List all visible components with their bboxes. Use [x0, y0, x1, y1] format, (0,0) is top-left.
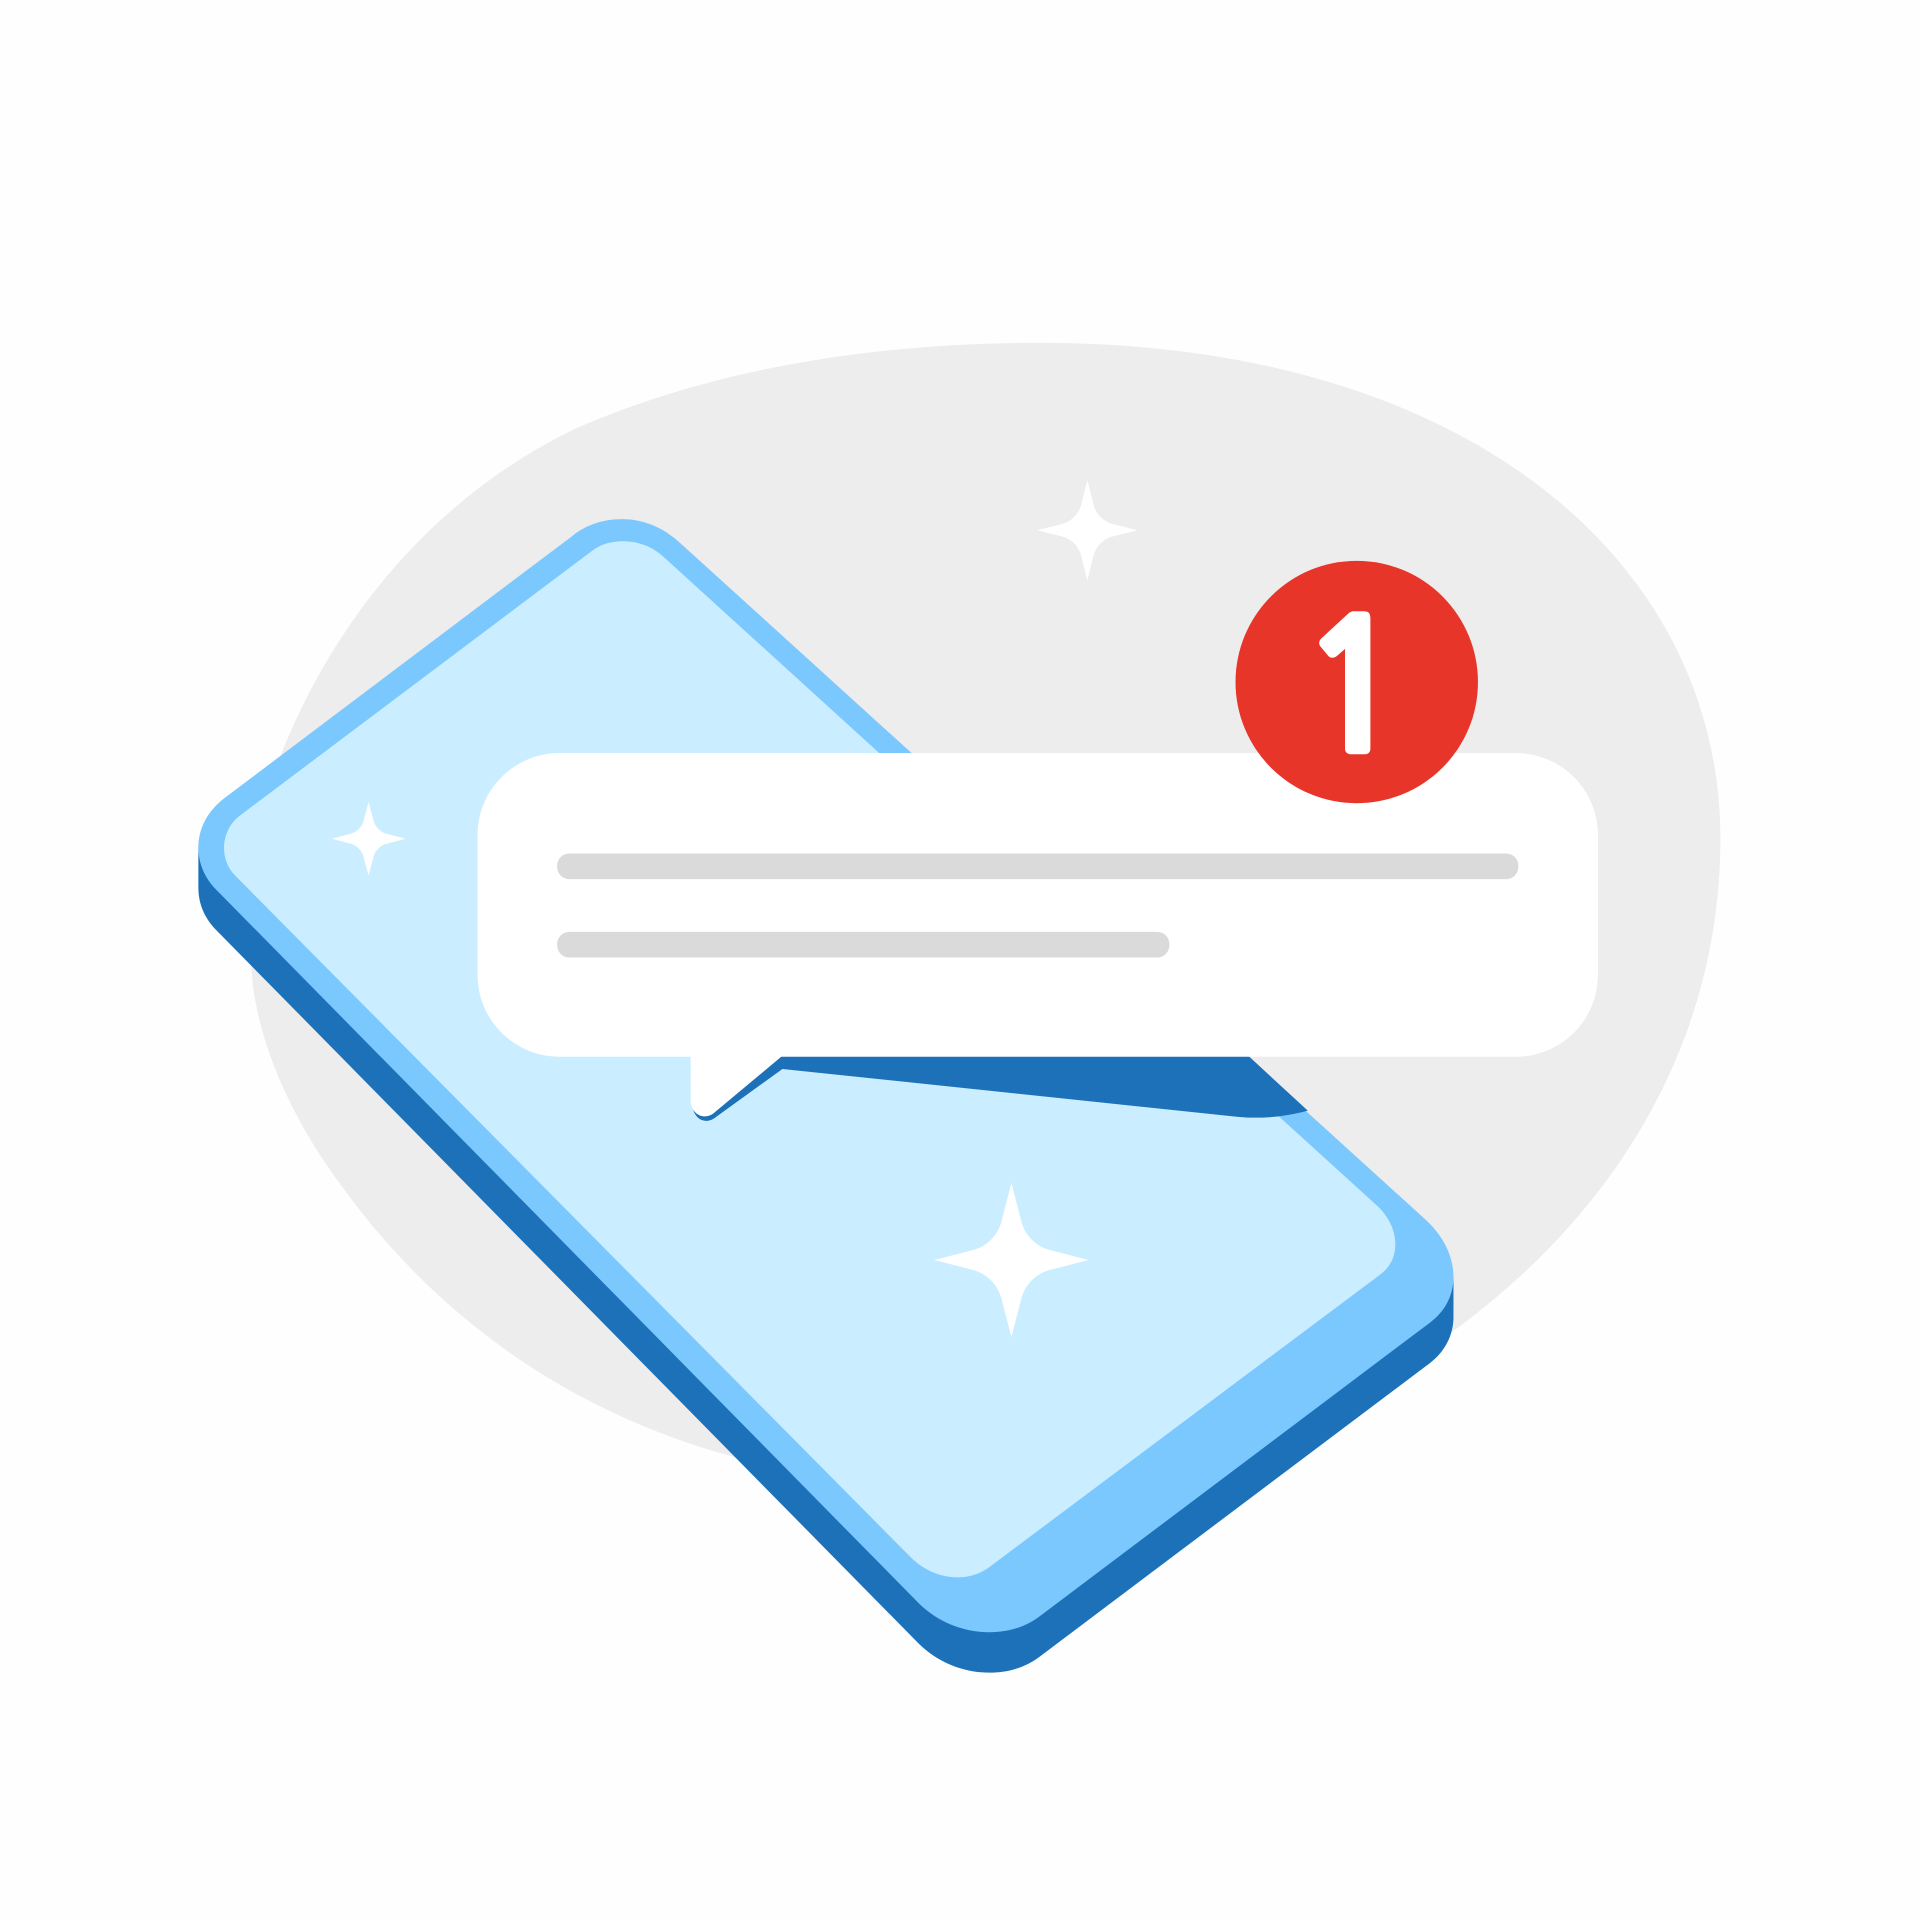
- background blob: [251, 343, 1720, 1457]
- phone screen: [224, 541, 1395, 1577]
- phone: [198, 519, 1453, 1673]
- notification badge: [1236, 561, 1478, 803]
- star: top: [1037, 480, 1138, 580]
- bubble body: [478, 753, 1598, 1116]
- text line 1: [557, 853, 1518, 879]
- text line 2: [557, 932, 1169, 958]
- badge circle: [1236, 561, 1478, 803]
- star: bottom: [934, 1183, 1089, 1337]
- phone outer frame: [198, 519, 1453, 1632]
- badge number: 1: [1299, 600, 1408, 778]
- speech bubble: [478, 753, 1598, 1121]
- star: left: [332, 802, 405, 876]
- phone shadow side: [198, 847, 1453, 1673]
- bubble shadow: [693, 1053, 1308, 1121]
